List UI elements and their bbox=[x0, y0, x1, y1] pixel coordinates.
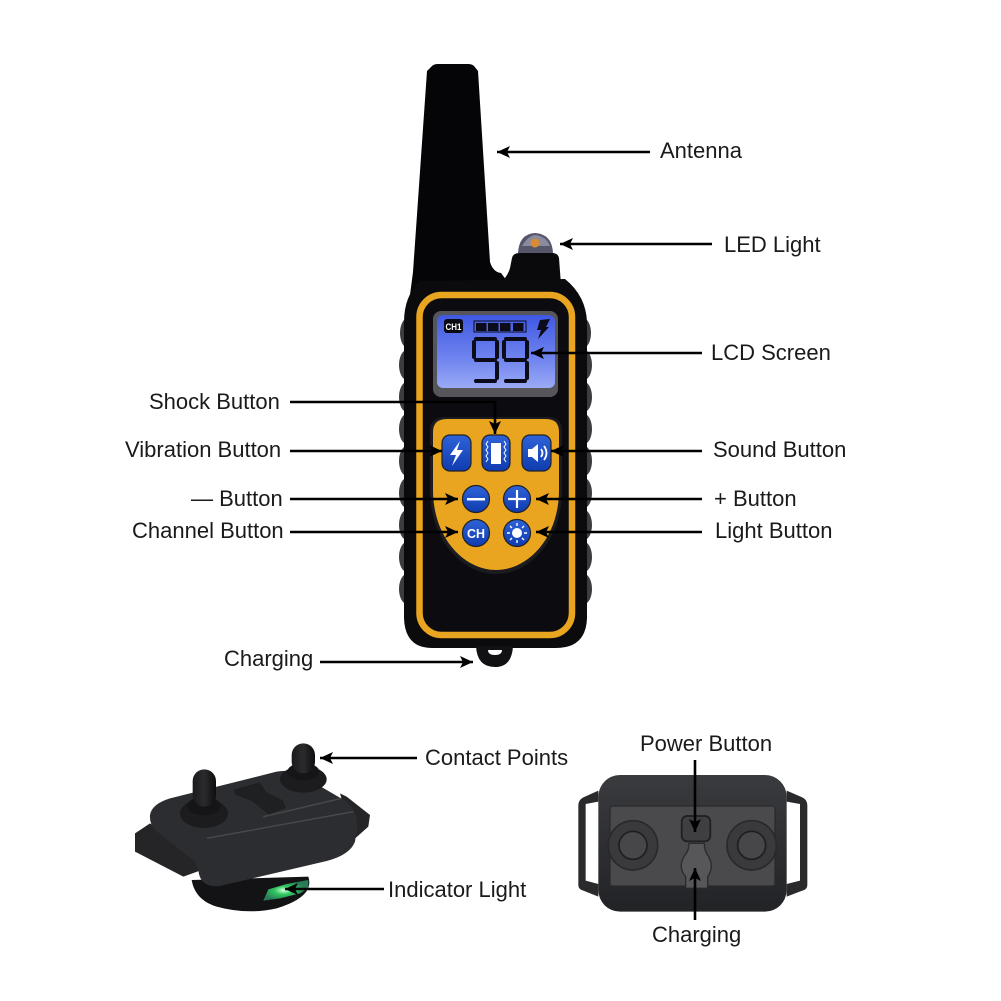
label: LCD screen: LCD Screen bbox=[711, 340, 831, 365]
label: channel button: Channel Button bbox=[132, 518, 284, 543]
labels bbox=[125, 138, 846, 947]
back panel bbox=[610, 806, 775, 886]
left contact socket bbox=[608, 821, 658, 870]
label: LED light: LED Light bbox=[724, 232, 821, 257]
light button bbox=[504, 520, 530, 546]
label: sound button: Sound Button bbox=[713, 437, 846, 462]
annotation arrows bbox=[285, 152, 712, 920]
shock symbol bbox=[537, 319, 550, 339]
collar receiver, angled view bbox=[135, 743, 370, 911]
label: indicator light: Indicator Light bbox=[388, 877, 526, 902]
LCD screen bbox=[433, 311, 558, 397]
antenna bbox=[410, 64, 510, 295]
plus button bbox=[504, 486, 530, 512]
minus button bbox=[462, 486, 490, 512]
channel button bbox=[462, 520, 490, 546]
label: shock button: Shock Button bbox=[149, 389, 280, 414]
yellow trim bbox=[420, 295, 572, 635]
back strap tabs bbox=[578, 791, 807, 897]
label: plus button: + Button bbox=[714, 486, 797, 511]
collar body bbox=[150, 771, 357, 886]
contact post left bbox=[180, 769, 228, 828]
power button bbox=[682, 816, 710, 841]
collar receiver, back view bbox=[578, 775, 807, 912]
transmitter remote bbox=[399, 64, 592, 667]
label: charging, remote: Charging bbox=[224, 646, 313, 671]
collar ridge bbox=[207, 798, 353, 838]
right contact socket bbox=[727, 821, 776, 870]
collar strap tabs bbox=[135, 793, 370, 877]
indicator light green bbox=[263, 880, 308, 901]
side grips bbox=[399, 318, 592, 604]
shock button bbox=[442, 435, 471, 471]
label: power button: Power Button bbox=[640, 731, 772, 756]
label: vibration button: Vibration Button bbox=[125, 437, 281, 462]
label: light button: Light Button bbox=[715, 518, 832, 543]
body bbox=[404, 279, 587, 648]
label: charging, collar: Charging bbox=[652, 922, 741, 947]
label: contact points: Contact Points bbox=[425, 745, 568, 770]
charging port bbox=[681, 843, 711, 888]
CH1 badge: CH1 bbox=[446, 322, 462, 333]
collar top button bbox=[233, 782, 287, 815]
charging loop bbox=[476, 646, 513, 667]
keypad bbox=[430, 417, 562, 574]
LED light bbox=[499, 233, 561, 285]
vibration button bbox=[482, 435, 510, 471]
digits 99 bbox=[474, 339, 527, 381]
contact post right bbox=[280, 743, 327, 793]
collar base bbox=[192, 877, 309, 911]
back body bbox=[598, 775, 787, 912]
label: antenna: Antenna bbox=[660, 138, 743, 163]
sound button bbox=[522, 435, 551, 471]
label: minus button: — Button bbox=[191, 486, 283, 511]
channel button: CH bbox=[467, 526, 485, 541]
battery indicator bbox=[474, 321, 526, 332]
